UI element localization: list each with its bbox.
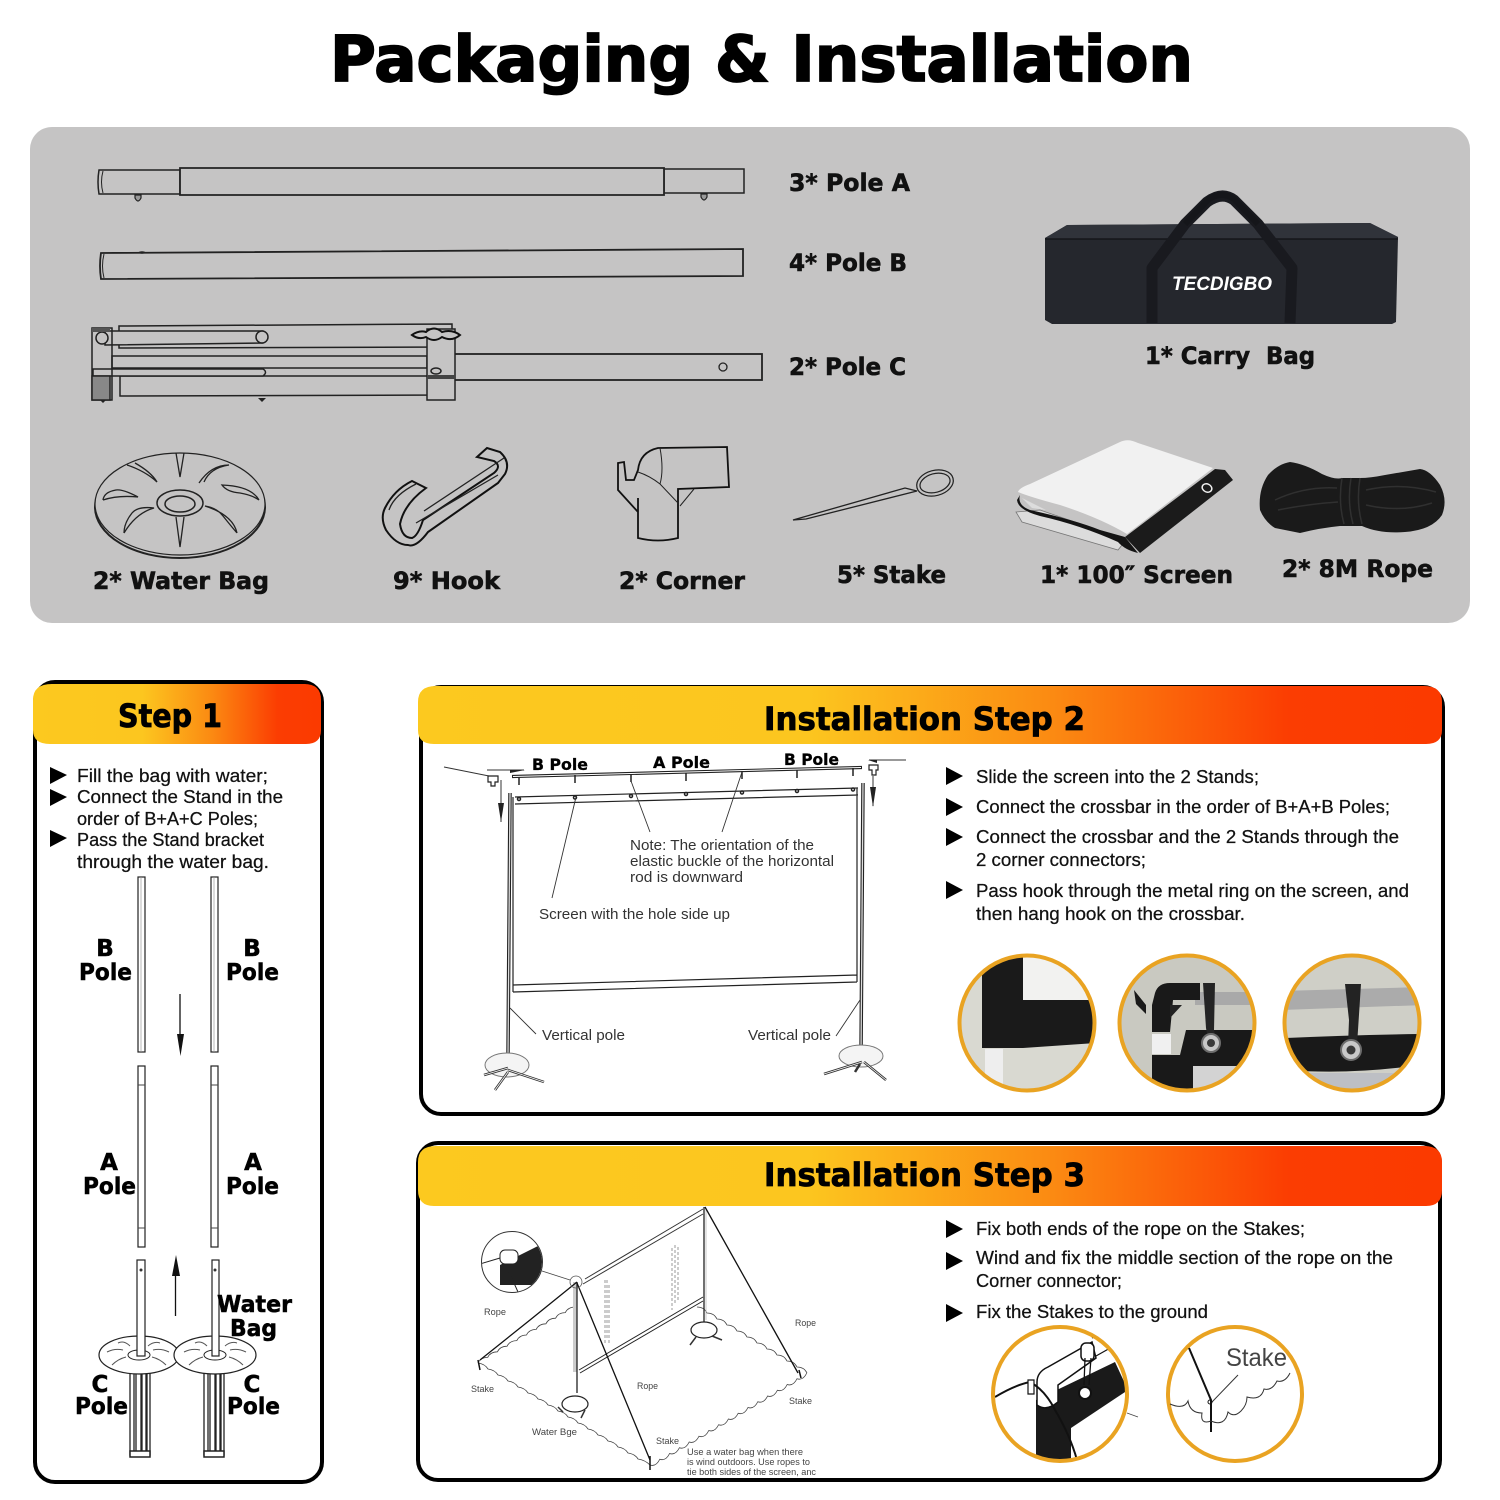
panel: step 1 — [33, 682, 322, 1482]
icon: pole A — [98, 168, 744, 201]
labels: crossbar poles: B Pole — [784, 750, 839, 769]
labels: C pole: Pole — [75, 1394, 128, 1420]
labels: A pole: Pole — [226, 1174, 279, 1200]
labels: B pole — [79, 936, 279, 986]
note: buckle orientation: elastic buckle of the horizontal — [630, 854, 834, 870]
labels: C pole — [75, 1372, 280, 1420]
label: vertical pole left: Vertical pole — [542, 1028, 625, 1044]
labels: B pole: B — [243, 936, 261, 962]
label: rope: 2* 8M Rope — [1282, 555, 1433, 583]
text: step 1 instructions: through the water bag. — [77, 852, 269, 872]
icon: rope — [1260, 462, 1445, 533]
text: step 3 instructions: Corner connector; — [976, 1271, 1122, 1291]
text: step 2 instructions: Pass hook through the metal ring on the screen, and — [976, 881, 1409, 901]
labels: rope and stake callouts: Stake — [789, 1396, 812, 1407]
text: step 2 instructions: Connect the crossbar in the order of B+A+B Poles; — [976, 797, 1390, 817]
text: step 3 instructions — [946, 1219, 1393, 1322]
arrow: up — [172, 1255, 180, 1316]
header: step 3 — [418, 1146, 1442, 1206]
icon: corner connector — [618, 447, 729, 540]
text: step 1 instructions: Fill the bag with water; — [77, 766, 268, 786]
label: carry bag: 1* Carry Bag — [1145, 342, 1315, 370]
note: wind advice: is wind outdoors. Use ropes to — [687, 1457, 810, 1468]
text: step 2 instructions: Connect the crossbar and the 2 Stands through the — [976, 827, 1399, 847]
note: wind advice — [687, 1447, 816, 1478]
text: step 1 instructions: order of B+A+C Poles; — [77, 809, 258, 829]
labels: C pole: Pole — [227, 1394, 280, 1420]
text: step 2 instructions — [946, 767, 1409, 924]
header: step 2: Installation Step 2 — [764, 700, 1085, 738]
labels: crossbar poles: A Pole — [653, 753, 710, 772]
label: screen: 1* 100″ Screen — [1040, 561, 1233, 589]
text: step 1 instructions — [50, 766, 283, 872]
labels: C pole: C — [244, 1372, 260, 1398]
text: step 3 instructions: Wind and fix the middle section of the rope on the — [976, 1248, 1393, 1268]
header: step 3: Installation Step 3 — [764, 1156, 1085, 1194]
label: water bag: 2* Water Bag — [93, 567, 269, 595]
labels: crossbar poles — [532, 750, 839, 774]
note: wind advice: Use a water bag when there — [687, 1447, 803, 1458]
diagram: rope and stake setup — [478, 1207, 807, 1470]
diagram: stand and screen assembly — [444, 760, 906, 1090]
icon: carry bag: TECDIGBO — [1172, 274, 1272, 295]
labels: B pole: Pole — [226, 960, 279, 986]
text: step 2 instructions: 2 corner connectors; — [976, 850, 1146, 870]
labels: C pole: C — [92, 1372, 108, 1398]
label: pole A: 3* Pole A — [789, 169, 910, 197]
note: buckle orientation: Note: The orientation of the — [630, 838, 814, 854]
labels: crossbar poles: B Pole — [532, 755, 588, 774]
labels: rope and stake callouts — [471, 1307, 816, 1447]
detail circle: stake in ground — [1168, 1327, 1302, 1461]
labels: rope and stake callouts: Rope — [484, 1307, 506, 1318]
labels: A pole: A — [100, 1150, 118, 1176]
label: stake: 5* Stake — [837, 561, 946, 589]
title: Packaging & Installation — [330, 23, 1193, 96]
label: water bag: Water — [217, 1292, 293, 1318]
icon: pole B — [100, 249, 743, 279]
labels: A pole: Pole — [83, 1174, 136, 1200]
label: water bag: Bag — [230, 1316, 277, 1342]
detail circle: stake in ground: Stake — [1226, 1344, 1287, 1372]
labels: rope and stake callouts: Rope — [637, 1381, 658, 1392]
header: step 1: Step 1 — [118, 697, 222, 735]
label: pole B: 4* Pole B — [789, 249, 907, 277]
text: step 1 instructions: Pass the Stand bracket — [77, 830, 264, 850]
note: buckle orientation: rod is downward — [630, 870, 743, 886]
label: water bag — [217, 1292, 293, 1342]
photo circle: corner connector and hook — [1115, 950, 1260, 1096]
text: step 3 instructions: Fix the Stakes to the ground — [976, 1302, 1208, 1322]
label: vertical pole right: Vertical pole — [748, 1028, 831, 1044]
labels: rope and stake callouts: Stake — [656, 1436, 679, 1447]
labels: rope and stake callouts: Water Bge — [532, 1427, 577, 1438]
panel: package contents — [30, 127, 1470, 623]
text: step 3 instructions: Fix both ends of the rope on the Stakes; — [976, 1219, 1305, 1239]
labels: rope and stake callouts: Rope — [795, 1318, 816, 1329]
label: hook: 9* Hook — [393, 567, 501, 595]
panel: installation step 3 — [418, 1143, 1442, 1480]
note: screen side: Screen with the hole side up — [539, 907, 730, 923]
label: pole C: 2* Pole C — [789, 353, 906, 381]
text: step 2 instructions: then hang hook on the crossbar. — [976, 904, 1245, 924]
icon: folded screen — [1016, 440, 1233, 553]
icon: pole C — [92, 324, 762, 403]
arrow: down — [177, 994, 184, 1056]
text: step 1 instructions: Connect the Stand in the — [77, 787, 283, 807]
icon: hook — [383, 448, 507, 545]
icon: stake — [793, 468, 954, 520]
header: step 1 — [33, 684, 321, 744]
text: step 2 instructions: Slide the screen into the 2 Stands; — [976, 767, 1259, 787]
labels: A pole — [83, 1150, 279, 1200]
labels: B pole: Pole — [79, 960, 132, 986]
icon: carry bag — [1045, 195, 1398, 324]
photo circle: screen corner — [958, 954, 1096, 1092]
panel: installation step 2 — [418, 686, 1443, 1114]
header: step 2 — [418, 686, 1442, 744]
labels: rope and stake callouts: Stake — [471, 1384, 494, 1395]
labels: B pole: B — [96, 936, 114, 962]
note: buckle orientation — [630, 838, 834, 886]
diagram: A poles — [138, 1066, 218, 1247]
icon: water bag — [95, 453, 265, 558]
label: corner: 2* Corner — [619, 567, 745, 595]
diagram: C poles with water bags — [99, 1260, 256, 1457]
diagram: B poles — [138, 877, 218, 1052]
labels: A pole: A — [244, 1150, 262, 1176]
detail circle: rope on corner connector — [990, 1325, 1138, 1470]
photo circle: hook through grommet — [1280, 950, 1425, 1098]
note: wind advice: tie both sides of the screen, anc — [687, 1467, 816, 1478]
